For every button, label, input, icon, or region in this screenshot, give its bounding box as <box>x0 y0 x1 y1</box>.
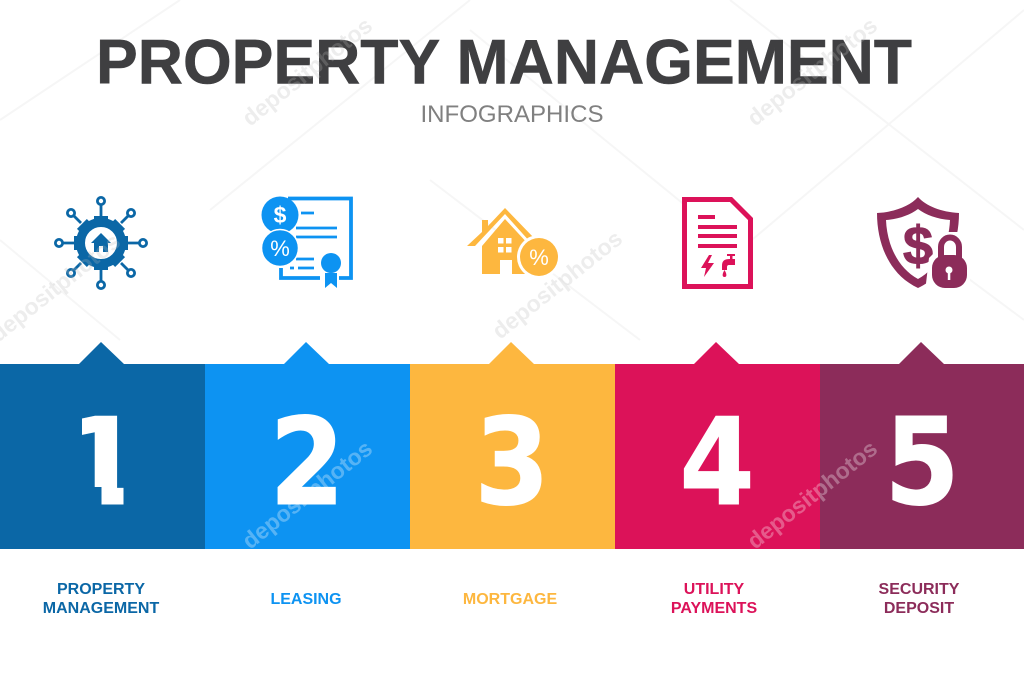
icon: mortgage house: % <box>529 245 549 270</box>
number 4: 4 <box>679 393 755 532</box>
text: depositphotos <box>742 12 882 131</box>
label: leasing: LEASING <box>270 591 342 608</box>
icon: security deposit shield <box>877 197 970 292</box>
number 2: 2 <box>269 393 345 532</box>
panel 2: band <box>205 342 410 549</box>
panel 3: band <box>410 342 615 549</box>
panel 4: band <box>615 342 820 549</box>
number 3: 3 <box>474 393 550 532</box>
subtitle: INFOGRAPHICS <box>420 101 604 128</box>
icon: leasing contract: % <box>270 236 290 261</box>
icon: utility bill document <box>684 200 750 286</box>
label: utility payments: PAYMENTS <box>671 600 757 617</box>
label: mortgage: MORTGAGE <box>463 591 557 608</box>
icon: mortgage house <box>467 208 561 279</box>
number 5: 5 <box>884 393 960 532</box>
icon: security deposit shield: $ <box>903 216 933 276</box>
label: security deposit: DEPOSIT <box>884 600 954 617</box>
text: depositphotos <box>237 12 377 131</box>
panel 5: band <box>820 342 1024 549</box>
text: depositphotos <box>487 225 627 344</box>
text: depositphotos <box>237 435 377 554</box>
panel 1: band <box>0 342 205 549</box>
label: property management: MANAGEMENT <box>43 600 159 617</box>
label: security deposit: SECURITY <box>879 581 959 598</box>
label: property management: PROPERTY <box>57 581 145 598</box>
number 1: 1 <box>61 394 145 533</box>
title: PROPERTY MANAGEMENT <box>96 28 912 98</box>
icon: leasing contract: $ <box>274 202 287 228</box>
icon: property management gear <box>55 197 147 289</box>
icon: leasing contract <box>262 196 351 288</box>
label: utility payments: UTILITY <box>684 581 744 598</box>
text: depositphotos <box>742 435 882 554</box>
